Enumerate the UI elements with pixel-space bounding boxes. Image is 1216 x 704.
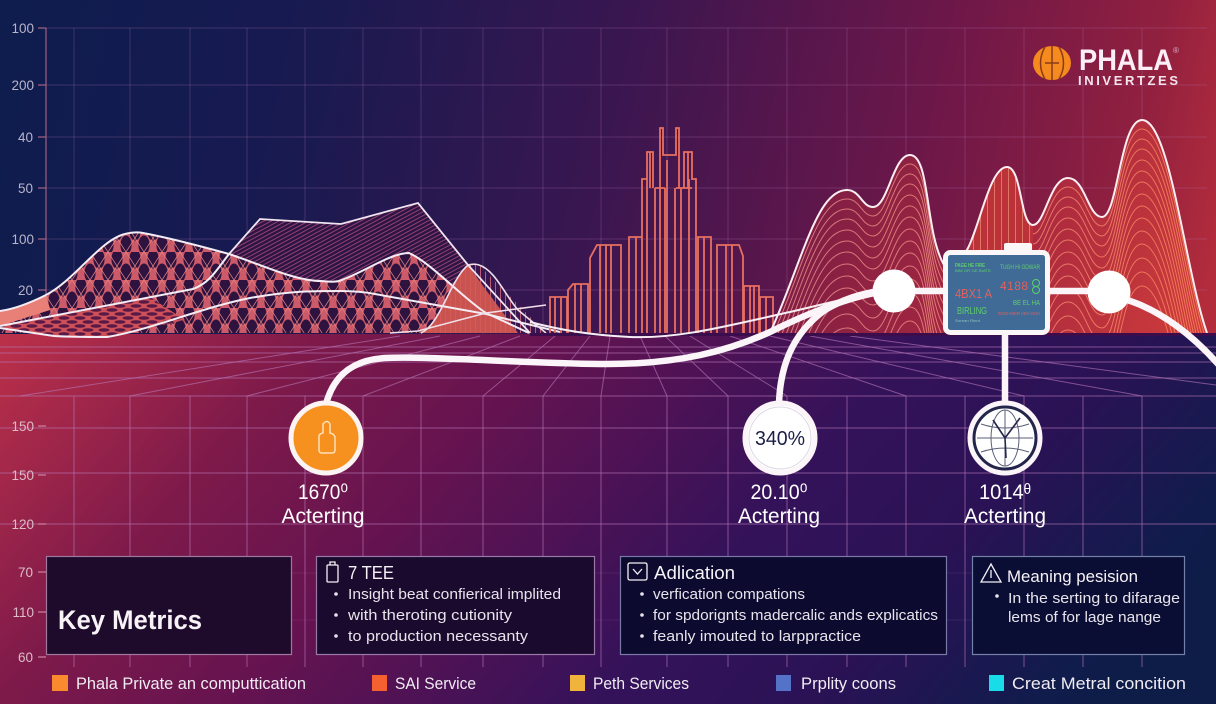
legend item 2: SAI Service (395, 674, 476, 693)
panel: 7 TEE: to production necessanty (348, 628, 529, 645)
panel: 7 TEE (316, 556, 594, 654)
device panel: 4188 (1000, 279, 1028, 293)
y axis lower: 150 (11, 468, 34, 483)
y axis upper: 100 (11, 21, 34, 36)
ridge chart: right peaks (771, 119, 1208, 333)
panel: Adlication: Adlication (654, 563, 735, 583)
floor edge (530, 333, 1216, 336)
metric node: percent: 340% (755, 428, 805, 450)
device panel (946, 243, 1048, 332)
y axis lower: 60 (18, 650, 33, 665)
metric node: percent (745, 403, 815, 473)
icon: phone (327, 562, 338, 582)
device panel: 4BX1 A (955, 286, 992, 301)
metric node: orange (291, 403, 361, 473)
metric label 1: Acterting (282, 505, 364, 528)
icon: orange sphere (1033, 46, 1071, 80)
metric label 3: 1014ᶿ (979, 481, 1031, 504)
legend item 5: Creat Metral concition (1012, 674, 1186, 693)
device panel: Sorean Rinnt (955, 318, 981, 323)
y axis lower (11, 419, 46, 665)
background lower area (0, 334, 1216, 704)
device panel: BE EL HA (1013, 300, 1040, 307)
metric label 1 (282, 481, 364, 528)
panel: 7 TEE: Insight beat confierical implited (348, 586, 561, 603)
panel: key metrics (46, 556, 292, 654)
y axis upper: 40 (18, 130, 33, 145)
logo (1033, 44, 1179, 88)
panel: Adlication: verfication compations (653, 586, 805, 603)
metric label 2: 20.10⁰ (750, 481, 808, 504)
logo: PHALA (1079, 44, 1173, 77)
device panel: TUGH HI GDWAR (1000, 265, 1041, 271)
legend (52, 674, 1186, 693)
connector line: timeline (326, 291, 1216, 404)
y axis lower: 120 (11, 517, 34, 532)
legend item 4: Prplity coons (801, 674, 896, 693)
panel: Meaning pesision: lems of for lage nange (1008, 609, 1161, 626)
y axis upper: 100 (11, 232, 34, 247)
metric node: globe clock (970, 403, 1040, 473)
legend item 3: Peth Services (593, 674, 689, 693)
y axis lower: 70 (18, 565, 33, 580)
y axis lower: 150 (11, 419, 34, 434)
metric label 3 (964, 481, 1046, 528)
metric label 1: 1670⁰ (298, 481, 348, 504)
legend item 1: Phala Private an computtication (76, 674, 306, 693)
device panel: ROGHWER HEH OOH (998, 311, 1040, 316)
device panel: PAGE HE FIRE (955, 263, 985, 269)
y axis upper: 20 (18, 283, 33, 298)
icon: warning triangle (981, 564, 1001, 582)
panel: 7 TEE: 7 TEE (348, 563, 394, 583)
panel: Adlication: feanly imouted to larppractice (653, 628, 861, 645)
thin trend line (530, 293, 870, 337)
y axis upper: 50 (18, 181, 33, 196)
logo: INIVERTZES (1078, 73, 1178, 88)
node: white dot left (872, 270, 916, 312)
y axis upper: 200 (11, 78, 34, 93)
panel: 7 TEE: with theroting cutionity (347, 607, 513, 624)
device panel: BIM GR GE BIATE (955, 268, 991, 273)
panel: Meaning pesision: Meaning pesision (1007, 567, 1138, 586)
y axis upper (11, 21, 46, 334)
y axis lower: 110 (12, 605, 34, 620)
mesh chart: left hills (0, 203, 560, 337)
panel: key metrics: Key Metrics (58, 605, 202, 635)
panel: Adlication: for spdorignts madercalic ands explicatics (653, 607, 938, 624)
panel: Meaning pesision: In the serting to difarage (1008, 590, 1180, 607)
node: white dot right (1088, 270, 1130, 314)
icon: tag (319, 422, 335, 453)
logo: ® (1173, 46, 1179, 55)
metric label 2: Acterting (738, 505, 820, 528)
metric label 2 (738, 481, 820, 528)
panel: Meaning pesision (972, 556, 1184, 654)
background upper chart area (0, 0, 1216, 336)
skyline bar chart (550, 128, 773, 334)
device panel: BIRLING (957, 306, 987, 317)
panel: Adlication (620, 556, 946, 654)
metric label 3: Acterting (964, 505, 1046, 528)
icon: envelope shield (628, 563, 647, 580)
